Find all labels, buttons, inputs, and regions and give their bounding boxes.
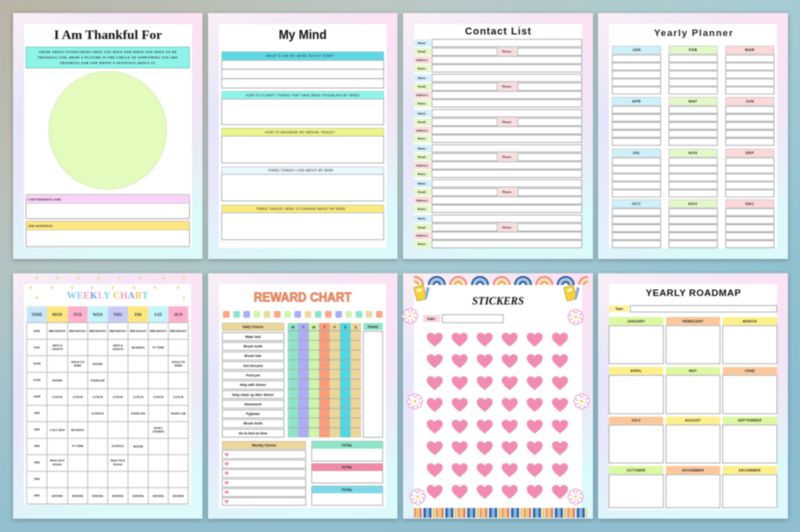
star decoration: [28, 276, 187, 300]
contact entry 2: Email:: [418, 85, 426, 89]
contact entry 5: Address:: [416, 198, 428, 202]
daily chores list: [222, 323, 284, 437]
days grid: T: [302, 326, 305, 330]
quarter 3: AUG: [688, 151, 698, 155]
table cells: PARK: [174, 365, 183, 368]
table header: MON: [52, 312, 62, 317]
quarter 3: SEP: [746, 151, 754, 155]
table cells: BREAKFAST: [69, 330, 86, 333]
table cells: CALL MAN: [50, 429, 65, 432]
table cells: 1PM: [34, 412, 40, 415]
contact entry 1: Name:: [418, 41, 426, 45]
month boxes row 2: MAY: [689, 369, 697, 373]
contact entry 5: [414, 180, 582, 212]
quarter 4: DEC: [745, 202, 754, 206]
table cells: LUNCH: [93, 396, 104, 399]
icon: flowers: [402, 308, 590, 505]
panel: Stickers: [402, 273, 595, 519]
panel: Reward Chart: [208, 273, 398, 519]
daily chores list: Brush teeth: [244, 344, 262, 348]
month boxes row 3: JULY: [631, 419, 641, 423]
month boxes row 4: DECEMBER: [739, 468, 761, 472]
section: on my mind: WHAT'S ON MY MIND RIGHT NOW?: [266, 54, 334, 58]
points column: [363, 323, 383, 437]
table cells: BREAKFAST: [109, 330, 126, 333]
days grid: M: [292, 326, 295, 330]
date field: Date:: [427, 317, 436, 321]
contact entry 2: Name:: [418, 76, 426, 80]
table header: SAT: [154, 312, 162, 317]
table cells: WASH CAR: [171, 412, 187, 415]
daily chores list: Brush teeth: [244, 422, 262, 426]
contact entry 6: Address:: [416, 234, 428, 238]
panel: Contact List: [403, 13, 593, 259]
quarter 4: [612, 200, 774, 248]
month boxes row 2: [609, 367, 777, 414]
table header: TIME: [31, 312, 43, 317]
daily chores list: Go to bed on time: [239, 431, 268, 435]
section: on my mind: [222, 52, 384, 88]
contact entry 1: Address:: [416, 58, 428, 62]
section: three things I like: THREE THINGS I LIKE ABOUT MY MIND: [268, 169, 334, 173]
table cells: 8AM: [34, 330, 40, 333]
quarter 2: JUN: [746, 100, 754, 104]
table cells: PARK: [74, 365, 82, 368]
quarter 3: JUL: [632, 151, 641, 155]
table cells: DINNER: [72, 495, 84, 498]
section: three things I like: [222, 167, 384, 201]
table cells: WALK TO: [172, 361, 186, 364]
total box 1: TOTAL: [342, 443, 352, 447]
table cells: READING: [71, 429, 85, 432]
table cells: LUNCH: [52, 396, 63, 399]
table cells: 10AM: [33, 363, 41, 366]
table cells: MATHS: [52, 380, 63, 382]
box: one sentence: ONE SENTENCE:: [28, 224, 53, 228]
heading: REWARD CHART: [254, 291, 352, 305]
table cells: 12PM: [33, 396, 41, 398]
contact entry 4: [414, 145, 582, 178]
daily chores list: Brush hair: [245, 354, 262, 358]
icon: notebook right: [564, 285, 580, 301]
contact entry 3: Address:: [416, 128, 428, 132]
table cells: DINNER: [153, 495, 165, 498]
total box 2: [312, 464, 383, 483]
section: clarify: HOW TO CLARIFY THINGS THAT HAVE BEEN TROUBLING MY MIND?: [246, 93, 360, 97]
total box 3: [312, 486, 383, 505]
table cells: LUNCH: [73, 396, 84, 399]
table cells: CRAFTS: [52, 348, 63, 351]
table cells: ARTS &: [52, 344, 63, 348]
table header: [27, 306, 188, 323]
daily chores list: Daily Chores: [243, 325, 263, 329]
days grid: S: [355, 326, 358, 330]
heading: YEARLY ROADMAP: [646, 288, 741, 299]
instruction box: THANKFUL FOR AND WRITE A SENTENCE ABOUT IT.: [60, 61, 156, 65]
table header: SUN: [174, 312, 182, 317]
section: mental peace: [222, 128, 384, 163]
month boxes row 1: FEBRUARY: [682, 319, 704, 323]
icon: notebook left: [414, 285, 430, 301]
table cells: SCIENCE: [91, 412, 104, 415]
contact entry 5: Notes:: [418, 207, 426, 211]
days grid: T: [323, 326, 326, 330]
table cells: BREAKFAST: [150, 330, 167, 333]
box: I am thankful for: [26, 195, 190, 219]
table cells: CHORES: [152, 431, 165, 434]
schedule table: [27, 306, 188, 504]
daily chores list: Help clean up after dinner: [232, 393, 274, 397]
table cells: WALK TO: [71, 361, 85, 364]
daily chores list: Homework: [244, 402, 262, 406]
table cells: 6PM: [34, 494, 40, 497]
contact entry 2: Address:: [416, 93, 428, 97]
table cells: BREAKFAST: [170, 330, 187, 333]
table cells: PRACTICE: [110, 460, 125, 463]
year field: Year:: [615, 307, 624, 311]
section: clarify: [222, 91, 384, 125]
quarter 2: APR: [632, 100, 641, 104]
contact entry 1: Notes:: [418, 66, 426, 70]
date field: [423, 315, 503, 323]
contact entry 6: Notes:: [418, 242, 426, 246]
quarter 1: MAR: [745, 48, 755, 52]
contact entry 4: Address:: [416, 163, 428, 167]
table cells: DINNER: [112, 495, 124, 498]
contact entry 3: Name:: [418, 111, 426, 115]
box: I am thankful for: I AM THANKFUL FOR:: [28, 197, 61, 201]
table cells: ARTS &: [113, 344, 124, 348]
instruction box: THINK ABOUT EVERYTHING THAT YOU HAVE AND WHAT YOU HAVE TO BE: [39, 50, 177, 54]
daily chores list: Help with dinner: [240, 383, 267, 387]
contact entry 4: Phone:: [502, 155, 512, 159]
contact entry 3: [414, 110, 582, 142]
table header: TUE: [73, 312, 82, 317]
contact entry 5: Email:: [418, 190, 426, 194]
table cells: MATHS: [93, 363, 103, 366]
contact entry 6: Email:: [418, 225, 426, 229]
weekly chores list: [222, 441, 306, 505]
contact entry 3: Phone:: [502, 120, 512, 124]
panel: Yearly Planner: [598, 13, 788, 259]
table cells: 11AM: [33, 379, 41, 382]
table cells: SCIENCE: [112, 445, 124, 448]
contact entry 3: Email:: [418, 120, 426, 124]
contact entry 6: [414, 215, 582, 248]
month boxes row 2: APRIL: [630, 369, 642, 373]
month boxes row 3: [609, 417, 777, 463]
table cells: READING: [132, 346, 146, 349]
daily chores list: Get dressed: [243, 364, 263, 368]
days grid: W: [312, 326, 316, 330]
table header: THU: [113, 312, 122, 317]
quarter 2: [612, 97, 774, 145]
heading: WEEKLY CHART: [67, 291, 149, 301]
colored squares row: [223, 311, 383, 318]
section: three things to change: [222, 205, 384, 240]
table header: WED: [93, 312, 103, 317]
table cells: 4PM: [34, 462, 40, 464]
heading: My Mind: [279, 27, 327, 42]
panel: My Mind: [208, 13, 398, 259]
table cells: LUNCH: [133, 396, 144, 399]
quarter 4: OCT: [632, 202, 641, 206]
table cells: CRAFTS: [112, 348, 124, 351]
section: three things to change: THREE THINGS I WISH TO CHANGE ABOUT MY MIND: [256, 207, 346, 211]
contact entry 6: Phone:: [502, 225, 512, 229]
panel: Weekly Chart: [13, 273, 202, 519]
table cells: LUNCH: [153, 396, 164, 399]
contact entry 4: Notes:: [418, 172, 426, 176]
daily chores list: Make bed: [245, 335, 261, 339]
panel: I Am Thankful For: [13, 13, 202, 259]
contact entry 1: Phone:: [502, 50, 512, 54]
month boxes row 3: AUGUST: [685, 419, 702, 423]
days grid: S: [344, 326, 347, 330]
contact entry 5: Phone:: [502, 190, 512, 194]
table cells: BREAKFAST: [89, 330, 106, 333]
section: mental peace: HOW TO MAXIMISE MY MENTAL PEACE?: [265, 130, 335, 134]
table header: FRI: [135, 312, 142, 317]
contact entry 4: Name:: [418, 146, 426, 150]
weekly chores list: Weekly Chores: [252, 444, 276, 448]
quarter 1: [612, 46, 774, 94]
table cells: DINNER: [173, 495, 185, 498]
heading: Yearly Planner: [654, 28, 733, 39]
daily chores list: Pyjamas: [246, 412, 260, 416]
contact entry 3: Notes:: [418, 137, 426, 141]
rainbow border bottom: [414, 508, 587, 518]
table cells: LUNCH: [173, 396, 184, 399]
quarter 4: NOV: [688, 202, 698, 206]
table cells: DINNER: [52, 495, 64, 498]
contact entry 2: [414, 74, 582, 107]
table cells: 9AM: [34, 346, 40, 349]
month boxes row 1: JANUARY: [627, 319, 646, 323]
contact entry 2: Notes:: [418, 101, 426, 105]
table cells: MATHS: [133, 445, 144, 448]
quarter 3: [612, 149, 774, 197]
table cells: PIANO: [53, 463, 63, 466]
total box 2: TOTAL: [342, 466, 352, 470]
rainbow border top: [407, 277, 595, 285]
table cells: EXERCISE: [131, 412, 145, 415]
contact entry 1: Email:: [418, 50, 426, 54]
table cells: TV TIME: [152, 346, 164, 349]
days grid: F: [334, 326, 336, 330]
days grid: [288, 323, 361, 437]
table cells: [33, 330, 187, 498]
month boxes row 2: JUNE: [745, 369, 755, 373]
contact entry 4: Email:: [418, 155, 426, 159]
box: one sentence: [26, 221, 190, 247]
month boxes row 1: [609, 317, 777, 364]
month boxes row 4: NOVEMBER: [682, 468, 704, 472]
table cells: DINNER: [133, 495, 145, 498]
table cells: LUNCH: [113, 396, 124, 399]
table cells: DINNER: [92, 495, 104, 498]
panel: Yearly Roadmap: [598, 273, 788, 519]
heart stickers grid: [427, 333, 568, 499]
contact entry 1: [414, 39, 582, 72]
table cells: BREAKFAST: [49, 330, 66, 333]
drawing circle: [49, 71, 167, 189]
table cells: EXERCISE: [91, 380, 105, 382]
table cells: PRACTICE: [50, 460, 65, 463]
total box 3: TOTAL: [342, 488, 352, 492]
contact entry 5: Name:: [418, 181, 426, 185]
table cells: TV TIME: [72, 445, 84, 448]
heading: I Am Thankful For: [54, 27, 162, 42]
month boxes row 4: [609, 466, 777, 508]
total box 1: [312, 441, 383, 461]
month boxes row 4: OCTOBER: [627, 468, 646, 472]
table cells: 5PM: [34, 478, 40, 481]
instruction box: THANKFUL FOR. DRAW A PICTURE IN THE CIRCLE OF SOMETHING YOU ARE: [38, 56, 178, 60]
table cells: PIANO: [113, 463, 123, 466]
contact entry 2: Phone:: [502, 85, 512, 89]
month boxes row 3: SEPTEMBER: [738, 419, 762, 423]
quarter 1: FEB: [689, 48, 697, 52]
points column: Points: [368, 325, 378, 329]
year field: [609, 305, 777, 312]
table cells: 3PM: [34, 445, 40, 448]
month boxes row 1: MARCH: [743, 319, 757, 323]
quarter 1: JAN: [632, 48, 641, 52]
quarter 2: MAY: [688, 100, 698, 104]
contact entry 6: Name:: [418, 217, 426, 221]
daily chores list: Feed pet: [246, 374, 261, 378]
table cells: 2PM: [34, 428, 40, 432]
heading: Contact List: [465, 27, 532, 38]
table grid: [27, 323, 188, 504]
heading: STICKERS: [472, 293, 524, 307]
table cells: DAILY: [154, 427, 163, 430]
table cells: BREAKFAST: [130, 330, 147, 333]
instruction box: [26, 47, 190, 68]
